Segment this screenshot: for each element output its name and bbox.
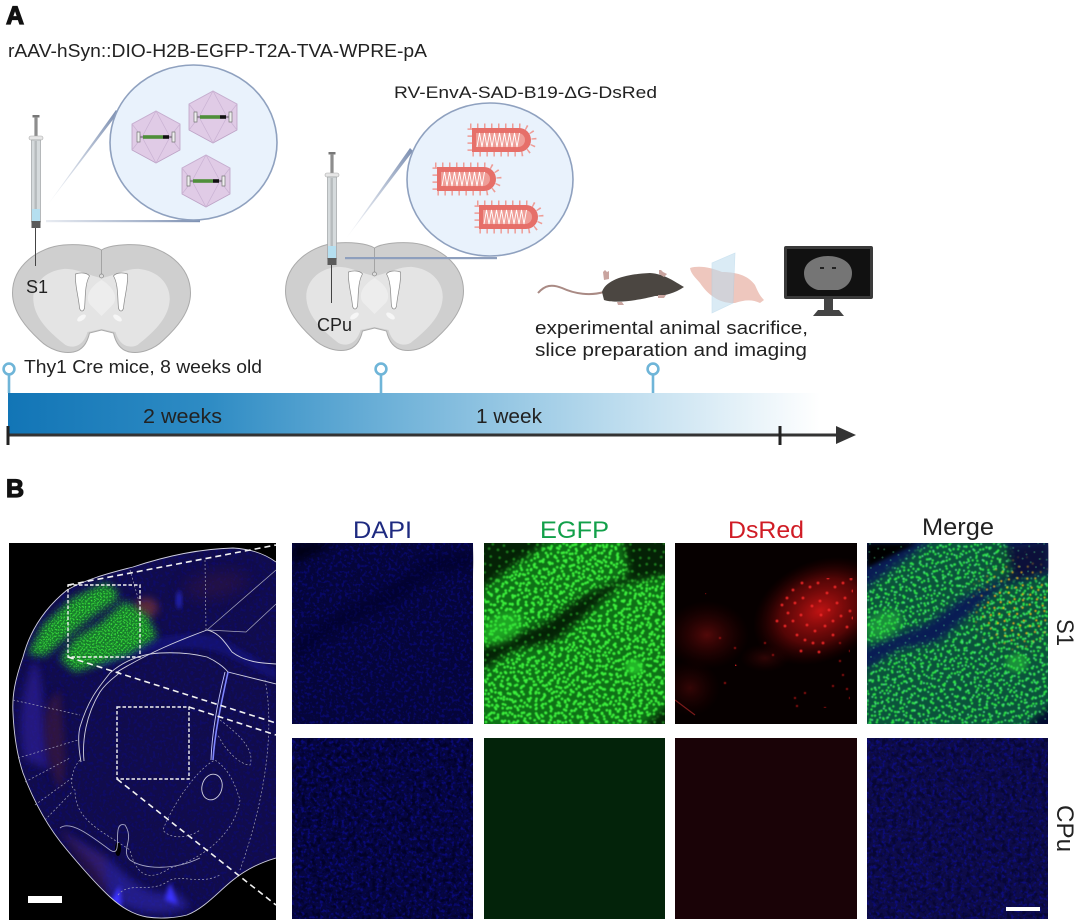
micrograph: EGFP CPu: [484, 738, 665, 919]
label CPu: CPu: [317, 315, 352, 335]
brain section S1: [12, 245, 190, 352]
red signal S1: [134, 598, 158, 618]
row heading S1: S1: [1051, 619, 1078, 646]
timeline pins: [4, 364, 658, 393]
red cells: [735, 578, 853, 666]
scale bar: [1006, 907, 1040, 911]
icon: mouse: [538, 270, 684, 305]
brain section CPu: [286, 243, 464, 350]
rabies virus construct title: RV-EnvA-SAD-B19-ΔG-DsRed: [394, 83, 657, 102]
RV zoom cone: [345, 148, 497, 259]
imaging caption: experimental animal sacrifice,: [535, 317, 808, 338]
green injection site S1: [24, 578, 162, 677]
AAV magnifier circle: [110, 65, 277, 220]
timeline: [4, 364, 856, 445]
region box S1: [68, 585, 140, 657]
micrograph: Merge CPu: [867, 738, 1048, 919]
micrograph: DAPI S1: [292, 543, 473, 724]
duration 1 week: 1 week: [476, 406, 543, 428]
micrograph: DsRed S1: [675, 543, 857, 724]
merged yellow cells: [967, 552, 1048, 657]
micrograph: Merge S1: [859, 543, 1048, 724]
atlas overlay outlines: [13, 548, 276, 918]
atlas dotted subdivisions: [13, 560, 269, 895]
syringe CPu: [325, 152, 339, 303]
mouse strain caption: Thy1 Cre mice, 8 weeks old: [24, 357, 262, 377]
panel A: experimental timeline schematic: [4, 41, 873, 445]
panel label B: B: [6, 475, 24, 503]
panel B: whole section micrograph: [9, 543, 276, 920]
timeline arrow: [8, 426, 856, 445]
imaging caption: slice preparation and imaging: [535, 339, 807, 360]
zoom guide lines: [68, 545, 276, 905]
duration 2 weeks: 2 weeks: [143, 406, 222, 428]
column heading EGFP: EGFP: [540, 517, 609, 544]
label S1: S1: [26, 277, 48, 297]
panel label A: A: [6, 2, 24, 30]
RV magnifier circle: [407, 103, 573, 256]
region box CPu: [117, 707, 189, 779]
brain tissue fluorescence: [9, 543, 276, 920]
icon: monitor: [784, 246, 873, 316]
scale bar: [28, 896, 62, 903]
row heading CPu: CPu: [1051, 805, 1078, 852]
AAV zoom cone: [46, 110, 200, 222]
syringe S1: [29, 115, 43, 266]
micrograph: DAPI CPu: [292, 738, 473, 919]
micrograph: DsRed CPu: [675, 738, 857, 919]
column heading DAPI: DAPI: [353, 517, 412, 544]
column heading DsRed: DsRed: [728, 517, 804, 544]
timeline gradient bar: [8, 393, 820, 435]
AAV construct title: rAAV-hSyn::DIO-H2B-EGFP-T2A-TVA-WPRE-pA: [8, 41, 427, 61]
icon: brain with slice plane: [690, 253, 764, 313]
imaging caption: [535, 317, 808, 360]
column heading Merge: Merge: [922, 514, 994, 541]
micrograph: EGFP S1: [476, 543, 665, 724]
